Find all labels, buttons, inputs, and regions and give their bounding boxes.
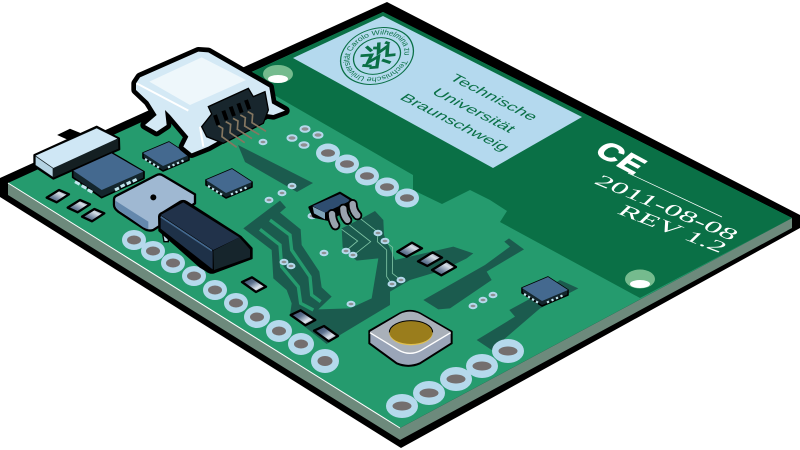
dark copper zone: [250, 12, 792, 298]
university seal: Technische Universität Carolo Wilhelmina zu: [343, 30, 410, 82]
CE mark: CE: [588, 136, 654, 180]
mounting hole right: [625, 270, 655, 288]
crystal: [159, 201, 252, 273]
chip QFN middle: [206, 169, 252, 198]
small resistors: [47, 190, 456, 341]
mounting hole top: [263, 65, 293, 83]
board edge: [8, 183, 792, 440]
through-hole pads: [122, 144, 524, 418]
chip QFN right: [522, 277, 568, 306]
USB connector: [136, 52, 285, 153]
buzzer: [114, 174, 195, 231]
chip QFN upper: [143, 142, 189, 171]
date and revision: 2011-08-08: [590, 171, 744, 244]
large chip: [73, 153, 144, 198]
university name: [396, 72, 542, 153]
traces: [238, 145, 578, 350]
university name: Universität: [428, 86, 520, 135]
university name: Braunschweig: [396, 91, 514, 153]
push button: [369, 311, 452, 366]
label plate: [293, 16, 582, 168]
date and revision: REV 1.2: [613, 202, 732, 256]
transistor: [309, 193, 357, 225]
slide switch: [34, 127, 119, 179]
university name: Technische: [446, 72, 542, 123]
vias: [260, 126, 496, 308]
front edge highlight: [8, 183, 400, 428]
